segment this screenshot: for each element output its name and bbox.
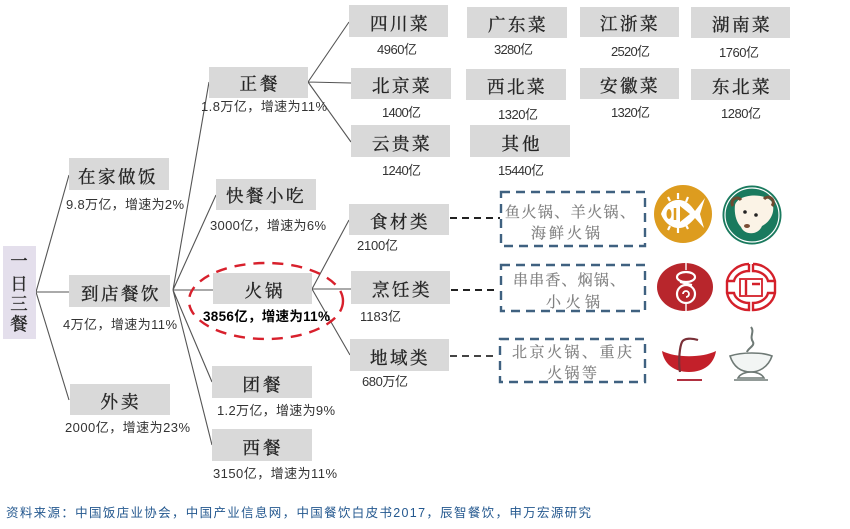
node: 到店餐饮 bbox=[63, 275, 177, 332]
detail box: 烹饪类 examples bbox=[501, 265, 645, 311]
node: 安徽菜: 1320亿 bbox=[611, 105, 650, 120]
node: 食材类: 2100亿 bbox=[357, 238, 398, 253]
red dashed ellipse highlight bbox=[189, 263, 343, 339]
dashed connectors to detail boxes bbox=[450, 218, 500, 356]
node: 火锅 highlighted: 3856亿，增速为11% bbox=[203, 308, 330, 324]
node: 到店餐饮: 4万亿，增速为11% bbox=[63, 317, 177, 332]
node: 其他: 15440亿 bbox=[498, 163, 544, 178]
node: 烹饪类 bbox=[351, 271, 450, 324]
detail box: 地域类 examples: 北京火锅、重庆 bbox=[512, 344, 632, 361]
root node: 一日三餐: 日 bbox=[10, 274, 28, 294]
root node: 一日三餐 bbox=[3, 246, 36, 339]
node: 食材类: 食材类 bbox=[370, 212, 430, 232]
node: 地域类: 地域类 bbox=[370, 348, 430, 368]
detail box: 烹饪类 examples: 串串香、焖锅、 bbox=[513, 272, 625, 289]
node: 正餐: 1.8万亿，增速为11% bbox=[201, 99, 327, 114]
node: 烹饪类: 烹饪类 bbox=[372, 280, 432, 300]
node: 外卖: 2000亿，增速为23% bbox=[65, 420, 190, 435]
icon: red round seal logo bbox=[657, 263, 713, 311]
node: 地域类: 680万亿 bbox=[362, 374, 408, 389]
node: 东北菜: 东北菜 bbox=[712, 77, 772, 97]
node: 其他 bbox=[470, 125, 570, 178]
connector lines of the tree bbox=[36, 22, 351, 445]
node: 烹饪类: 1183亿 bbox=[360, 309, 401, 324]
node: 火锅 highlighted bbox=[203, 273, 330, 324]
node: 四川菜: 4960亿 bbox=[377, 42, 417, 57]
node: 快餐小吃: 3000亿，增速为6% bbox=[210, 218, 326, 233]
node: 安徽菜 bbox=[580, 68, 679, 120]
detail box: 烹饪类 examples: 小火锅 bbox=[546, 294, 600, 311]
node: 湖南菜 bbox=[691, 7, 790, 60]
source footer: 资料来源：中国饭店业协会，中国产业信息网，中国餐饮白皮书2017，辰智餐饮，申万宏源研究 bbox=[6, 505, 591, 520]
node: 北京菜 bbox=[351, 68, 451, 120]
node: 广东菜 bbox=[467, 7, 567, 57]
node: 正餐 bbox=[201, 67, 327, 114]
node: 江浙菜: 2520亿 bbox=[611, 44, 650, 59]
node: 江浙菜 bbox=[580, 7, 679, 59]
node: 团餐: 1.2万亿，增速为9% bbox=[217, 403, 335, 418]
node: 云贵菜 bbox=[351, 125, 450, 178]
root node: 一日三餐: 餐 bbox=[10, 314, 28, 334]
detail box: 食材类 examples: 海鲜火锅 bbox=[531, 225, 600, 242]
node: 西餐 bbox=[212, 429, 337, 481]
node: 江浙菜: 江浙菜 bbox=[600, 14, 660, 34]
icon: green sheep logo bbox=[722, 186, 782, 244]
node: 火锅 highlighted: 火锅 bbox=[244, 281, 286, 301]
icon: red bowl logo bbox=[662, 339, 716, 380]
node: 在家做饭: 9.8万亿，增速为2% bbox=[66, 197, 184, 212]
node: 其他: 其他 bbox=[502, 134, 542, 154]
node: 西北菜 bbox=[466, 69, 566, 122]
icon: gold fish logo bbox=[654, 185, 712, 243]
root node: 一日三餐: 三 bbox=[10, 294, 28, 314]
node: 四川菜: 四川菜 bbox=[370, 14, 430, 34]
node: 在家做饭: 在家做饭 bbox=[78, 167, 158, 187]
node: 广东菜: 广东菜 bbox=[488, 15, 548, 35]
node: 地域类 bbox=[350, 339, 449, 389]
node: 西北菜: 1320亿 bbox=[498, 107, 538, 122]
node: 云贵菜: 云贵菜 bbox=[372, 134, 432, 154]
node: 正餐: 正餐 bbox=[240, 74, 280, 94]
node: 西北菜: 西北菜 bbox=[487, 77, 547, 97]
node: 北京菜: 1400亿 bbox=[382, 105, 421, 120]
node: 西餐: 西餐 bbox=[242, 438, 284, 458]
root node: 一日三餐: 一 bbox=[10, 251, 28, 271]
node: 团餐 bbox=[212, 366, 335, 418]
detail box: 食材类 examples: 鱼火锅、羊火锅、 bbox=[505, 204, 635, 221]
node: 在家做饭 bbox=[66, 158, 184, 212]
node: 外卖 bbox=[65, 384, 190, 435]
node: 食材类 bbox=[349, 204, 449, 253]
detail box: 食材类 examples bbox=[501, 192, 645, 246]
icon: gray steaming bowl logo bbox=[730, 327, 772, 380]
node: 北京菜: 北京菜 bbox=[372, 76, 432, 96]
node: 快餐小吃: 快餐小吃 bbox=[226, 186, 306, 206]
node: 云贵菜: 1240亿 bbox=[382, 163, 421, 178]
node: 四川菜 bbox=[349, 5, 448, 57]
node: 团餐: 团餐 bbox=[242, 375, 284, 395]
node: 东北菜 bbox=[691, 69, 790, 121]
node: 外卖: 外卖 bbox=[100, 392, 142, 412]
node: 广东菜: 3280亿 bbox=[494, 42, 533, 57]
node: 安徽菜: 安徽菜 bbox=[600, 76, 660, 96]
node: 湖南菜: 1760亿 bbox=[719, 45, 759, 60]
node: 到店餐饮: 到店餐饮 bbox=[81, 284, 161, 304]
node: 快餐小吃 bbox=[210, 179, 326, 233]
detail box: 地域类 examples bbox=[500, 339, 645, 382]
node: 东北菜: 1280亿 bbox=[721, 106, 761, 121]
node: 湖南菜: 湖南菜 bbox=[712, 15, 772, 35]
node: 西餐: 3150亿，增速为11% bbox=[213, 466, 337, 481]
detail box: 地域类 examples: 火锅等 bbox=[547, 365, 597, 382]
icon: red outline seal logo bbox=[727, 264, 775, 310]
